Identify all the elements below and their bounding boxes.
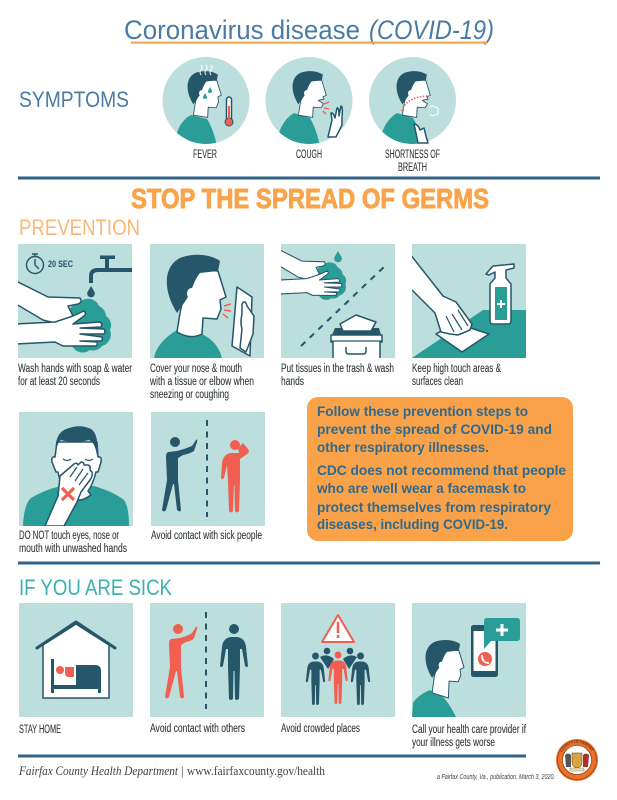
caption — [19, 530, 127, 555]
caption: Cover your nose & mouth — [150, 363, 242, 375]
publication note: a Fairfax County, Va., publication. March 3, 2020. — [437, 774, 555, 781]
panel: call your provider — [412, 603, 527, 749]
caption — [412, 724, 527, 749]
label: fever: FEVER — [193, 149, 217, 161]
panel: keep surfaces clean — [410, 244, 526, 388]
caption — [18, 363, 132, 388]
caption — [281, 363, 394, 388]
panel: wash hands — [16, 244, 132, 388]
panel: tissues in trash — [280, 244, 395, 388]
panel: do not touch face — [19, 412, 133, 555]
caption: Put tissues in the trash & wash — [281, 363, 394, 375]
caption: surfaces clean — [412, 376, 463, 388]
footer text: www.fairfaxcounty.gov/health — [187, 764, 326, 778]
caption: Wash hands with soap & water — [18, 363, 132, 375]
callout: who are well wear a facemask to — [316, 480, 526, 496]
caption: your illness gets worse — [412, 737, 495, 749]
heading: symptoms: SYMPTOMS — [19, 87, 129, 112]
label: cough: COUGH — [296, 149, 322, 161]
heading: if you are sick: IF YOU ARE SICK — [19, 575, 172, 600]
heading: prevention: PREVENTION — [19, 215, 140, 240]
caption: sneezing or coughing — [150, 389, 229, 401]
panel: avoid sick people — [151, 412, 265, 542]
icon: fever — [162, 57, 250, 146]
caption: Avoid crowded places — [281, 723, 360, 735]
caption: mouth with unwashed hands — [19, 543, 127, 555]
panel: wash hands: 20 SEC — [48, 259, 73, 269]
footer text: Fairfax County Health Department — [18, 764, 178, 778]
callout: diseases, including COVID-19. — [317, 516, 508, 532]
caption: DO NOT touch eyes, nose or — [19, 530, 119, 542]
caption: Avoid contact with sick people — [151, 530, 262, 542]
caption: STAY HOME — [19, 724, 61, 736]
panel: avoid crowded places — [281, 603, 395, 735]
icon: shortness of breath — [369, 57, 456, 146]
panel: cover nose and mouth — [149, 244, 264, 401]
callout: CDC does not recommend that people — [317, 462, 566, 478]
title — [124, 15, 494, 45]
label: shortness of breath: BREATH — [398, 162, 427, 174]
callout: other respiratory illnesses. — [317, 439, 489, 455]
callout: Follow these prevention steps to — [317, 403, 528, 419]
label: shortness of breath — [385, 149, 440, 174]
caption — [149, 363, 254, 401]
icon: county seal — [556, 739, 598, 781]
panel: stay home — [19, 603, 133, 736]
caption: for at least 20 seconds — [18, 376, 100, 388]
callout — [307, 397, 573, 541]
caption: Keep high touch areas & — [412, 363, 501, 375]
caption — [412, 363, 501, 388]
footer text — [18, 764, 326, 778]
footer text: | — [181, 764, 184, 778]
title: Coronavirus disease — [124, 15, 360, 45]
caption: Call your health care provider if — [412, 724, 527, 736]
heading: stop the spread of germs: STOP THE SPREAD OF GERMS — [131, 183, 489, 214]
title: (COVID-19) — [369, 15, 494, 45]
caption: with a tissue or elbow when — [149, 376, 254, 388]
label: shortness of breath: SHORTNESS OF — [385, 149, 440, 161]
caption: Avoid contact with others — [150, 723, 245, 735]
callout: prevent the spread of COVID-19 and — [317, 421, 552, 437]
icon: county seal: COUNTY OF FAIRFAX — [560, 740, 594, 752]
icon: cough — [266, 57, 352, 146]
caption: hands — [281, 376, 304, 388]
panel: avoid contact with others — [150, 603, 264, 735]
callout: protect themselves from respiratory — [317, 499, 551, 515]
